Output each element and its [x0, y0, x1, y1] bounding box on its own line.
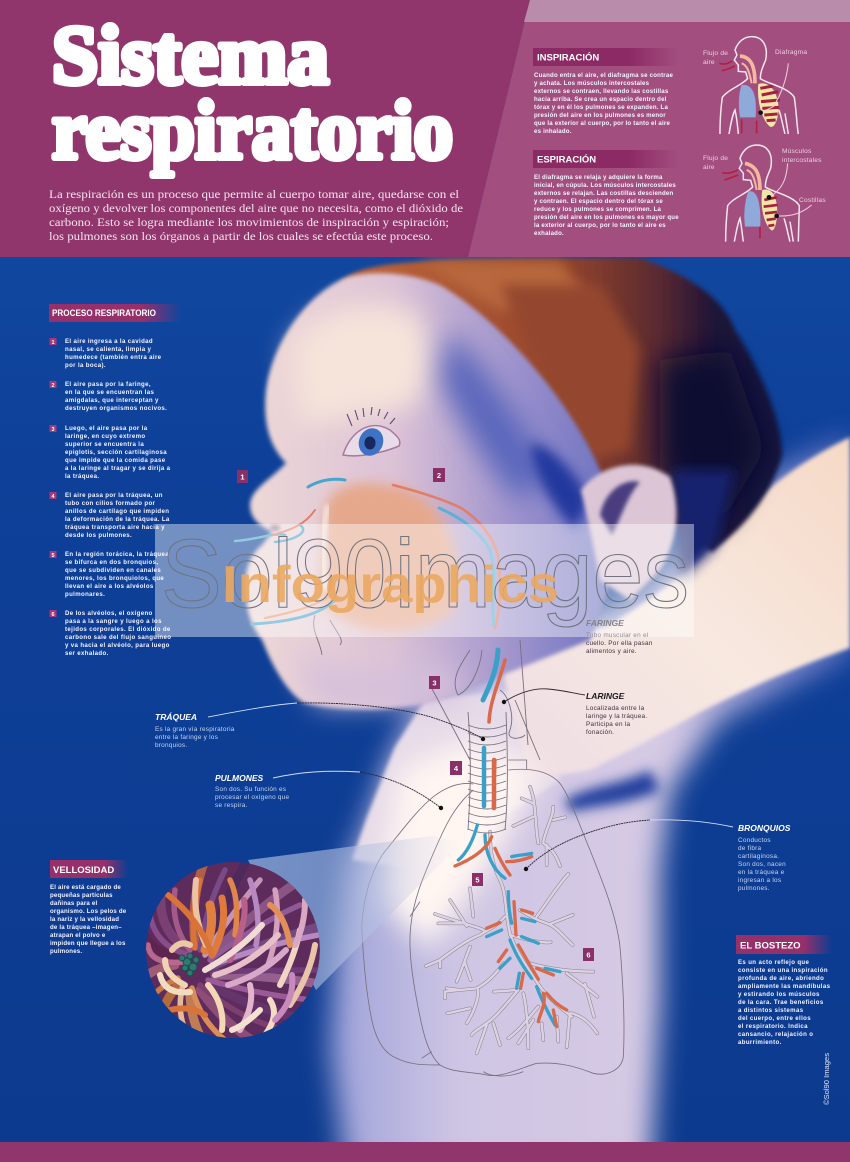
nostril	[270, 525, 280, 531]
watermark: Sol90images	[161, 519, 689, 628]
step 2: 2	[51, 383, 55, 389]
text: vellosidad: pulmones.	[50, 948, 82, 955]
intro text: oxígeno y devolver los componentes del aire que no necesita, como el dióxido de	[49, 201, 463, 215]
heading: espiración	[533, 150, 680, 168]
text: el bostezo: a distintos sistemas	[738, 1007, 804, 1014]
number markers on anatomy: 2	[437, 471, 441, 480]
heading: vellosidad: VELLOSIDAD	[53, 865, 114, 876]
diagram: inspiration	[719, 37, 798, 134]
label: bronquios: Conductos	[738, 837, 771, 844]
label: faringe: Tubo muscular en el	[586, 632, 648, 639]
diagram labels	[703, 49, 826, 204]
text: espiración: la exterior al cuerpo, por lo tanto el aire es	[534, 222, 666, 229]
leader: laringe	[502, 689, 585, 704]
diagram labels: aire	[703, 59, 715, 66]
step 1: nasal, se calienta, limpia y	[65, 346, 152, 353]
step 4: tráquea transporta aire hacia y	[65, 524, 165, 531]
text: espiración: presión del aire en los pulmones es mayor que	[534, 214, 679, 221]
heading: el bostezo	[736, 935, 832, 954]
chest highlight	[380, 740, 540, 950]
credit: ©Sol90 Images	[822, 1053, 831, 1105]
text: inspiración: tórax y en él los pulmones se expanden. La	[534, 104, 668, 111]
label: faringe: cuello. Por ella pasan	[586, 640, 653, 647]
peach edge highlight	[323, 505, 328, 590]
number markers on anatomy: 1	[240, 472, 245, 482]
step 6: 6	[51, 612, 55, 618]
text: vellosidad: dañinas para el	[50, 900, 97, 907]
label: bronquios: ingresan a los	[738, 877, 781, 884]
text: vellosidad: atrapan el polvo e	[50, 932, 106, 939]
text: espiración: y contraen. El espacio dentro del tórax se	[534, 198, 663, 205]
diagram: expiration	[722, 145, 812, 242]
torso	[330, 435, 850, 1162]
label: bronquios: Son dos, nacen	[738, 861, 786, 868]
arrows: nose and mouth	[235, 479, 500, 628]
step 5: 5	[51, 553, 55, 559]
eye	[343, 407, 400, 459]
label: laringe: Localizada entre la	[586, 705, 645, 712]
step 3: Luego, el aire pasa por la	[65, 425, 148, 432]
text: inspiración: que la exterior al cuerpo, por lo tanto el aire	[534, 120, 670, 127]
intro text: carbono. Esto se logra mediante los movimientos de inspiración y espiración;	[49, 215, 449, 229]
hair top light	[420, 262, 590, 310]
diagram labels: Costillas	[799, 197, 826, 204]
diagram labels: Músculos	[782, 148, 812, 155]
label: pulmones: Son dos. Su función es	[215, 786, 286, 793]
ear	[581, 465, 676, 600]
light cone from villi image	[248, 836, 462, 990]
label: tráquea: entre la faringe y los	[155, 734, 218, 741]
label: laringe: LARINGE	[586, 691, 625, 701]
text: el bostezo: Es un acto reflejo que	[738, 959, 809, 966]
villi: base layer	[146, 862, 318, 1038]
heading: inspiración	[533, 48, 680, 66]
label: laringe: laringe y la tráquea.	[586, 713, 647, 720]
title: Sistema	[52, 9, 329, 102]
heading: el bostezo: EL BOSTEZO	[740, 940, 801, 952]
label: pulmones: se respira.	[215, 802, 248, 809]
step 3: superior se encuentra la	[65, 441, 144, 448]
villi: back layer	[148, 870, 322, 1040]
title	[52, 9, 453, 177]
label: bronquios: pulmones.	[738, 885, 770, 892]
neck shadow behind ear	[672, 470, 735, 580]
title: respiratorio	[52, 84, 453, 177]
number markers on anatomy: 6	[586, 950, 591, 960]
step 1: 1	[51, 340, 55, 346]
step 3: 3	[51, 427, 55, 433]
text: vellosidad: la nariz y la vellosidad	[50, 916, 119, 923]
text: el bostezo: profunda de aire, abriendo	[738, 975, 824, 982]
step 6	[50, 610, 171, 657]
text: el bostezo	[738, 959, 831, 1046]
step 1: humedece (también entra aire	[65, 354, 162, 361]
number markers on anatomy: 4	[454, 764, 459, 773]
label: tráquea	[155, 712, 235, 749]
text: espiración	[534, 174, 679, 237]
watermark: Infographics	[222, 556, 559, 614]
text: el bostezo: ampliamente las mandíbulas	[738, 983, 831, 990]
label: bronquios: BRONQUIOS	[738, 823, 791, 833]
step 4: anillos de cartílago que impiden	[65, 508, 169, 515]
diagram labels: intercostales	[782, 157, 822, 164]
step 2	[50, 381, 167, 412]
step 2: en la que se encuentran las	[65, 389, 155, 396]
label: faringe: FARINGE	[586, 618, 624, 628]
step 2: amígdalas, que interceptan y	[65, 397, 159, 404]
anatomy: trachea and throat	[314, 615, 540, 833]
armpit shadow	[565, 770, 660, 812]
step 4: desde los pulmones.	[65, 532, 132, 539]
step 1: El aire ingresa a la cavidad	[65, 338, 153, 345]
step 5: se bifurca en dos bronquios,	[65, 559, 158, 566]
anatomy: lungs outline	[362, 760, 624, 1076]
step 1: por la boca).	[65, 362, 106, 369]
step 5: pulmonares.	[65, 591, 105, 598]
label: laringe	[586, 691, 647, 736]
arrows: throat	[483, 650, 505, 722]
label: bronquios	[738, 823, 791, 892]
text: el bostezo: de la cara. Trae beneficios	[738, 999, 824, 1006]
text: espiración: reduce y los pulmones se comprimen. La	[534, 206, 662, 213]
step 3: epiglotis, sección cartilaginosa	[65, 449, 167, 456]
arrows: air flow	[235, 479, 567, 1027]
label: pulmones	[215, 773, 290, 809]
number markers on anatomy: 3	[432, 678, 437, 688]
step 4: tubo con cilios formado por	[65, 500, 156, 507]
leader: tráquea	[208, 703, 485, 741]
arm	[500, 437, 850, 780]
label: pulmones: PULMONES	[215, 773, 264, 783]
face and head	[246, 273, 616, 709]
step 6: tejidos corporales. El dióxido de	[65, 626, 171, 633]
heading: proceso respiratorio: PROCESO RESPIRATORIO	[52, 308, 156, 319]
jaw lower shade	[290, 650, 470, 705]
hair	[340, 258, 782, 552]
intro text: La respiración es un proceso que permite al cuerpo tomar aire, quedarse con el	[49, 187, 460, 201]
step 4: El aire pasa por la tráquea, un	[65, 492, 163, 499]
label: tráquea: bronquios.	[155, 742, 187, 749]
photo: baby	[246, 258, 850, 1162]
step 4: la deformación de la tráquea. La	[65, 516, 170, 523]
arrows: bronchi	[455, 760, 567, 1027]
label: tráquea: Es la gran vía respiratoria	[155, 726, 235, 733]
text: inspiración	[534, 72, 673, 135]
text: vellosidad	[50, 884, 127, 955]
text: vellosidad: organismo. Los pelos de	[50, 908, 127, 915]
text: espiración: exhalado.	[534, 230, 564, 237]
text: vellosidad: impiden que llegue a los	[50, 940, 126, 947]
text: vellosidad: de la tráquea –imagen–	[50, 924, 122, 931]
anatomy: bronchial tree	[426, 787, 597, 1053]
heading: vellosidad	[50, 860, 128, 878]
text: inspiración: y achata. Los músculos intercostales	[534, 80, 650, 87]
diagram labels: Flujo de	[703, 50, 728, 57]
step 3: a la laringe al tragar y se dirija a	[65, 465, 171, 472]
text: espiración: El diafragma se relaja y adquiere la forma	[534, 174, 663, 181]
header band: right	[468, 0, 850, 257]
text: inspiración: hacia arriba. Se crea un espacio dentro del	[534, 96, 667, 103]
step 5	[50, 551, 169, 598]
text: inspiración: presión del aire en los pulmones es menor	[534, 112, 666, 119]
hair dark back	[660, 350, 765, 525]
text: vellosidad: El aire está cargado de	[50, 884, 121, 891]
label: faringe: alimentos y aire.	[586, 648, 637, 655]
leader: pulmones	[273, 771, 443, 810]
hair auburn	[500, 285, 640, 460]
text: espiración: externos se relajan. Las costillas descienden	[534, 190, 673, 197]
heading: proceso respiratorio	[49, 304, 181, 322]
forehead light	[290, 304, 430, 425]
label: tráquea: TRÁQUEA	[155, 712, 197, 722]
label: laringe: Participa en la	[586, 721, 630, 728]
step 6: carbono sale del flujo sanguíneo	[65, 634, 171, 641]
text: el bostezo: el respiratorio. Indica	[738, 1023, 808, 1030]
step 3	[50, 425, 171, 480]
arrows: trachea	[484, 748, 494, 808]
label: laringe: fonación.	[586, 729, 614, 736]
text: el bostezo: y estirando los músculos	[738, 991, 820, 998]
step 5: llevan el aire a los alvéolos	[65, 583, 154, 590]
list: process steps	[50, 338, 171, 657]
step 6: y va hacia el alvéolo, para luego	[65, 642, 170, 649]
temple shadow	[440, 330, 555, 500]
villi: tuft center	[179, 953, 199, 976]
step 5: que se subdividen en canales	[65, 567, 161, 574]
heading: inspiración: INSPIRACIÓN	[537, 52, 599, 64]
cheek and mouth peach	[320, 483, 458, 631]
text: el bostezo: cansancio, relajación o	[738, 1031, 813, 1038]
label: faringe	[586, 618, 653, 655]
header band: top strip	[524, 0, 850, 22]
text: el bostezo: del cuerpo, entre ellos	[738, 1015, 811, 1022]
text: inspiración: externos se contraen, llevando las costillas	[534, 88, 669, 95]
image: villi circle	[146, 862, 320, 1038]
step 6: pasa a la sangre y luego a los	[65, 618, 162, 625]
bottom band	[0, 1142, 850, 1162]
label: bronquios: en la tráquea e	[738, 869, 785, 876]
leader: bronquios	[524, 820, 733, 871]
cheek dark blue	[530, 444, 590, 530]
text: el bostezo: aburrimiento.	[738, 1039, 782, 1046]
step 5: menores, los bronquiolos, que	[65, 575, 164, 582]
step 2: destruyen organismos nocivos.	[65, 405, 167, 412]
step 3: que impide que la comida pase	[65, 457, 166, 464]
step 3: la tráquea.	[65, 473, 99, 480]
intro text	[49, 187, 463, 243]
text: espiración: inicial, en cúpula. Los músculos intercostales	[534, 182, 676, 189]
label: bronquios: de fibra	[738, 845, 762, 852]
text: inspiración: Cuando entra el aire, el diafragma se contrae	[534, 72, 673, 79]
leader lines	[208, 689, 733, 871]
step 5: En la región torácica, la tráquea	[65, 551, 169, 558]
step 1	[50, 338, 162, 369]
villi: front layer	[160, 880, 315, 1038]
diagram labels: aire	[703, 164, 715, 171]
step 6: De los alvéolos, el oxígeno	[65, 610, 153, 617]
number markers on anatomy: 5	[475, 876, 480, 884]
step 4: 4	[51, 494, 55, 500]
heading: espiración: ESPIRACIÓN	[537, 154, 596, 166]
text: el bostezo: consiste en una inspiración	[738, 967, 828, 974]
text: vellosidad: pequeñas partículas	[50, 892, 113, 899]
upper chest edge	[352, 690, 560, 870]
text: inspiración: es inhalado.	[534, 128, 572, 135]
label: bronquios: cartilaginosa.	[738, 853, 779, 860]
intro text: los pulmones son los órganos a partir de los cuales se efectúa este proceso.	[49, 229, 433, 243]
label: pulmones: procesar el oxígeno que	[215, 794, 290, 801]
step 2: El aire pasa por la faringe,	[65, 381, 151, 388]
step 4	[50, 492, 170, 539]
step 6: ser exhalado.	[65, 650, 109, 657]
number markers on anatomy	[237, 468, 594, 961]
diagram labels: Flujo de	[703, 155, 728, 162]
diagram labels: Diafragma	[775, 49, 807, 56]
header band: left	[0, 0, 530, 257]
step 3: laringe, en cuyo extremo	[65, 433, 145, 440]
